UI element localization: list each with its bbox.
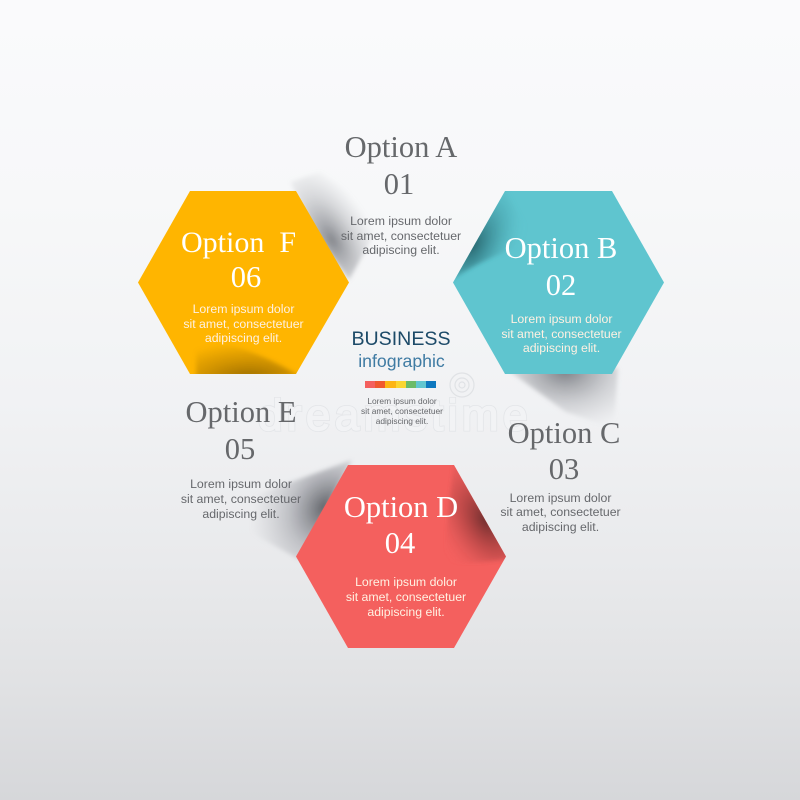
panel: Option C text [500,416,621,534]
hexagon D inner fold shadow [448,468,506,563]
text: Option F body: adipiscing elit. [205,331,282,345]
text: Option C body: Lorem ipsum dolor [510,491,611,505]
text: Option A body: sit amet, consectetuer [341,229,461,243]
panel: Option E text [181,395,301,521]
hexagon F shape [138,191,349,374]
shadow: hexagon F outer [290,172,385,280]
text: Option B body: adipiscing elit. [523,341,600,355]
number: 05: 05 [225,432,255,466]
text: Option E body: Lorem ipsum dolor [190,477,292,491]
text: central body: adipiscing elit. [376,416,428,426]
text: Option F body: Lorem ipsum dolor [193,302,294,316]
shadow: hexagon B outer [505,368,618,428]
panel: Option A text [341,130,461,257]
hexagon F inner fold shadow [194,347,296,374]
text: Option D body: Lorem ipsum dolor [355,575,457,589]
heading: Option B: Option B [505,231,617,265]
text: central body: sit amet, consectetuer [361,406,443,416]
text: Option E body: adipiscing elit. [202,507,280,521]
subtitle: infographic: infographic [358,351,445,371]
watermark: dreamstime [258,391,532,440]
watermark: dreamstime [258,391,532,440]
text: Option A body: adipiscing elit. [362,243,440,257]
text: central body: Lorem ipsum dolor [367,396,437,406]
hexagon B inner fold shadow [455,196,512,279]
number: 01: 01 [384,167,414,201]
panel: central title [351,328,451,426]
number: 03: 03 [549,452,579,486]
heading: Option C: Option C [508,416,620,450]
hexagon D shape [296,465,506,648]
heading: Option F: Option F [181,226,296,259]
text: Option E body: sit amet, consectetuer [181,492,301,506]
text: Option D body: sit amet, consectetuer [346,590,466,604]
heading: Option A: Option A [345,130,457,164]
text: Option C body: adipiscing elit. [522,520,599,534]
colour strip [365,381,436,388]
text: Option D body: adipiscing elit. [367,605,445,619]
text: Option C body: sit amet, consectetuer [500,505,621,519]
title: BUSINESS: BUSINESS [351,328,451,350]
text: Option F body: sit amet, consectetuer [183,317,304,331]
number: 06: 06 [231,260,261,294]
hexagon B shape [453,191,664,374]
number: 02: 02 [546,268,576,302]
heading: Option E: Option E [186,395,296,429]
panel: Option D hexagon [296,460,512,648]
panel: Option F hexagon [138,191,349,378]
number: 04: 04 [385,526,415,560]
text: Option B body: Lorem ipsum dolor [511,312,612,326]
text: Option B body: sit amet, consectetuer [501,327,622,341]
shadow: hexagon D outer [250,460,352,560]
text: Option A body: Lorem ipsum dolor [350,214,452,228]
panel: Option B hexagon [445,185,664,374]
heading: Option D: Option D [344,490,458,524]
